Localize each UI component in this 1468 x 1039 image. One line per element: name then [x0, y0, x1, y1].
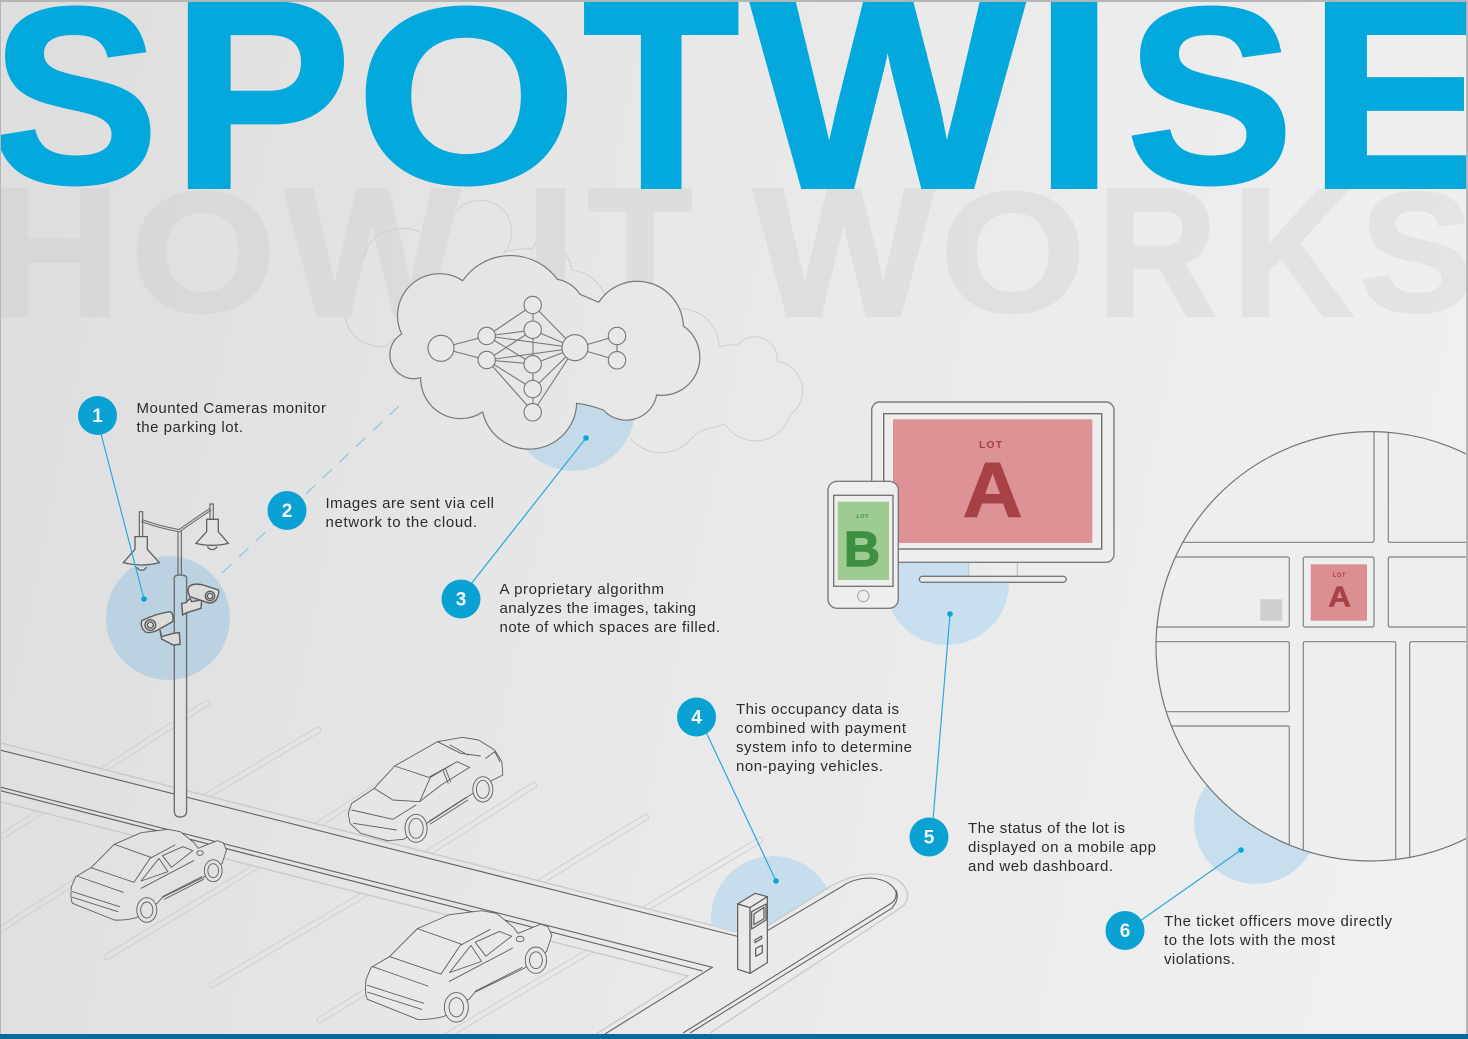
step 6: violations. — [1164, 951, 1235, 968]
step 5: The status of the lot is — [968, 820, 1125, 837]
subtitle: how it works: W — [284, 150, 460, 354]
step 6 — [1106, 911, 1392, 968]
step 3 highlight circle — [511, 347, 635, 471]
monitor: web dashboard — [872, 402, 1114, 582]
left lamp — [123, 537, 159, 570]
step 3: analyzes the images, taking — [500, 600, 696, 617]
grey lot marker — [1260, 599, 1282, 621]
step 6: to the lots with the most — [1164, 932, 1336, 949]
step 4: non-paying vehicles. — [736, 758, 883, 775]
car: lower coupe — [366, 911, 552, 1022]
lamps and security cameras — [123, 504, 228, 645]
step 4: combined with payment — [736, 720, 907, 737]
loop road and payment kiosk — [683, 874, 907, 1033]
step 2: Images are sent via cell — [326, 495, 494, 512]
map blocks — [1156, 432, 1466, 859]
bottom bar — [0, 1034, 1468, 1039]
step 2: 2 — [282, 501, 292, 522]
road surface — [0, 743, 740, 976]
lamp arms — [139, 504, 213, 575]
step 1: Mounted Cameras monitor — [136, 400, 326, 417]
parking stall markings — [0, 703, 760, 1036]
subtitle: how it works: T — [588, 150, 692, 354]
subtitle: how it works: W — [754, 150, 934, 354]
lot A marker — [1311, 564, 1367, 621]
background clouds — [345, 200, 802, 453]
step 4 — [677, 698, 912, 775]
street lamp pole — [174, 575, 187, 817]
phone: mobile app — [828, 481, 898, 608]
step 2: network to the cloud. — [326, 514, 477, 531]
step 1: the parking lot. — [136, 419, 243, 436]
right lamp — [196, 519, 228, 550]
step 6: The ticket officers move directly — [1164, 913, 1392, 930]
step 6: 6 — [1120, 921, 1130, 942]
step 5 — [910, 818, 1156, 875]
subtitle: how it works: O — [130, 158, 276, 348]
phone home button — [858, 590, 869, 602]
car: upper sedan — [348, 737, 503, 842]
map lot label: LOT — [1333, 573, 1346, 579]
city map lens — [1155, 431, 1466, 862]
cloud with neural network — [390, 256, 700, 449]
step 4 highlight circle — [711, 856, 827, 932]
step 5: displayed on a mobile app — [968, 839, 1156, 856]
subtitle: how it works: I — [525, 150, 576, 354]
lot B label: LOT — [856, 514, 869, 520]
right camera — [182, 584, 219, 615]
map lot letter: A — [1328, 582, 1351, 614]
step 1 — [78, 396, 326, 436]
step 5 highlight circle — [885, 521, 1009, 645]
step 3: note of which spaces are filled. — [500, 619, 720, 636]
step 5: and web dashboard. — [968, 858, 1113, 875]
step 3: A proprietary algorithm — [500, 581, 664, 598]
subtitle: how it works: O — [940, 158, 1086, 348]
step 3 — [442, 580, 720, 636]
neural network nodes — [428, 296, 626, 421]
lot A label: LOT — [979, 439, 1003, 451]
payment kiosk — [738, 893, 767, 973]
left camera — [141, 612, 180, 645]
lot A letter: A — [963, 446, 1023, 534]
step 4: system info to determine — [736, 739, 912, 756]
connector end dots — [141, 435, 1244, 884]
step 1: 1 — [92, 406, 103, 427]
subtitle: how it works: K — [1232, 150, 1353, 354]
step 3: 3 — [456, 590, 466, 610]
neural network edges — [441, 305, 617, 412]
parking lot — [0, 703, 760, 1036]
car: left coupe — [71, 829, 226, 922]
loop road — [683, 874, 907, 1033]
monitor stand — [919, 562, 1066, 582]
step 6 highlight circle — [1194, 760, 1318, 884]
lot B letter: B — [844, 523, 880, 577]
lot A status screen — [893, 419, 1092, 543]
lot B status screen — [838, 502, 889, 580]
step 4: This occupancy data is — [736, 701, 899, 718]
step 2 — [268, 491, 494, 531]
step 5: 5 — [924, 828, 935, 848]
step 1 highlight circle — [106, 556, 230, 680]
parked cars — [71, 737, 552, 1022]
connector lines — [100, 406, 1241, 921]
step 4: 4 — [691, 708, 702, 728]
subtitle: how it works: R — [1097, 150, 1217, 354]
